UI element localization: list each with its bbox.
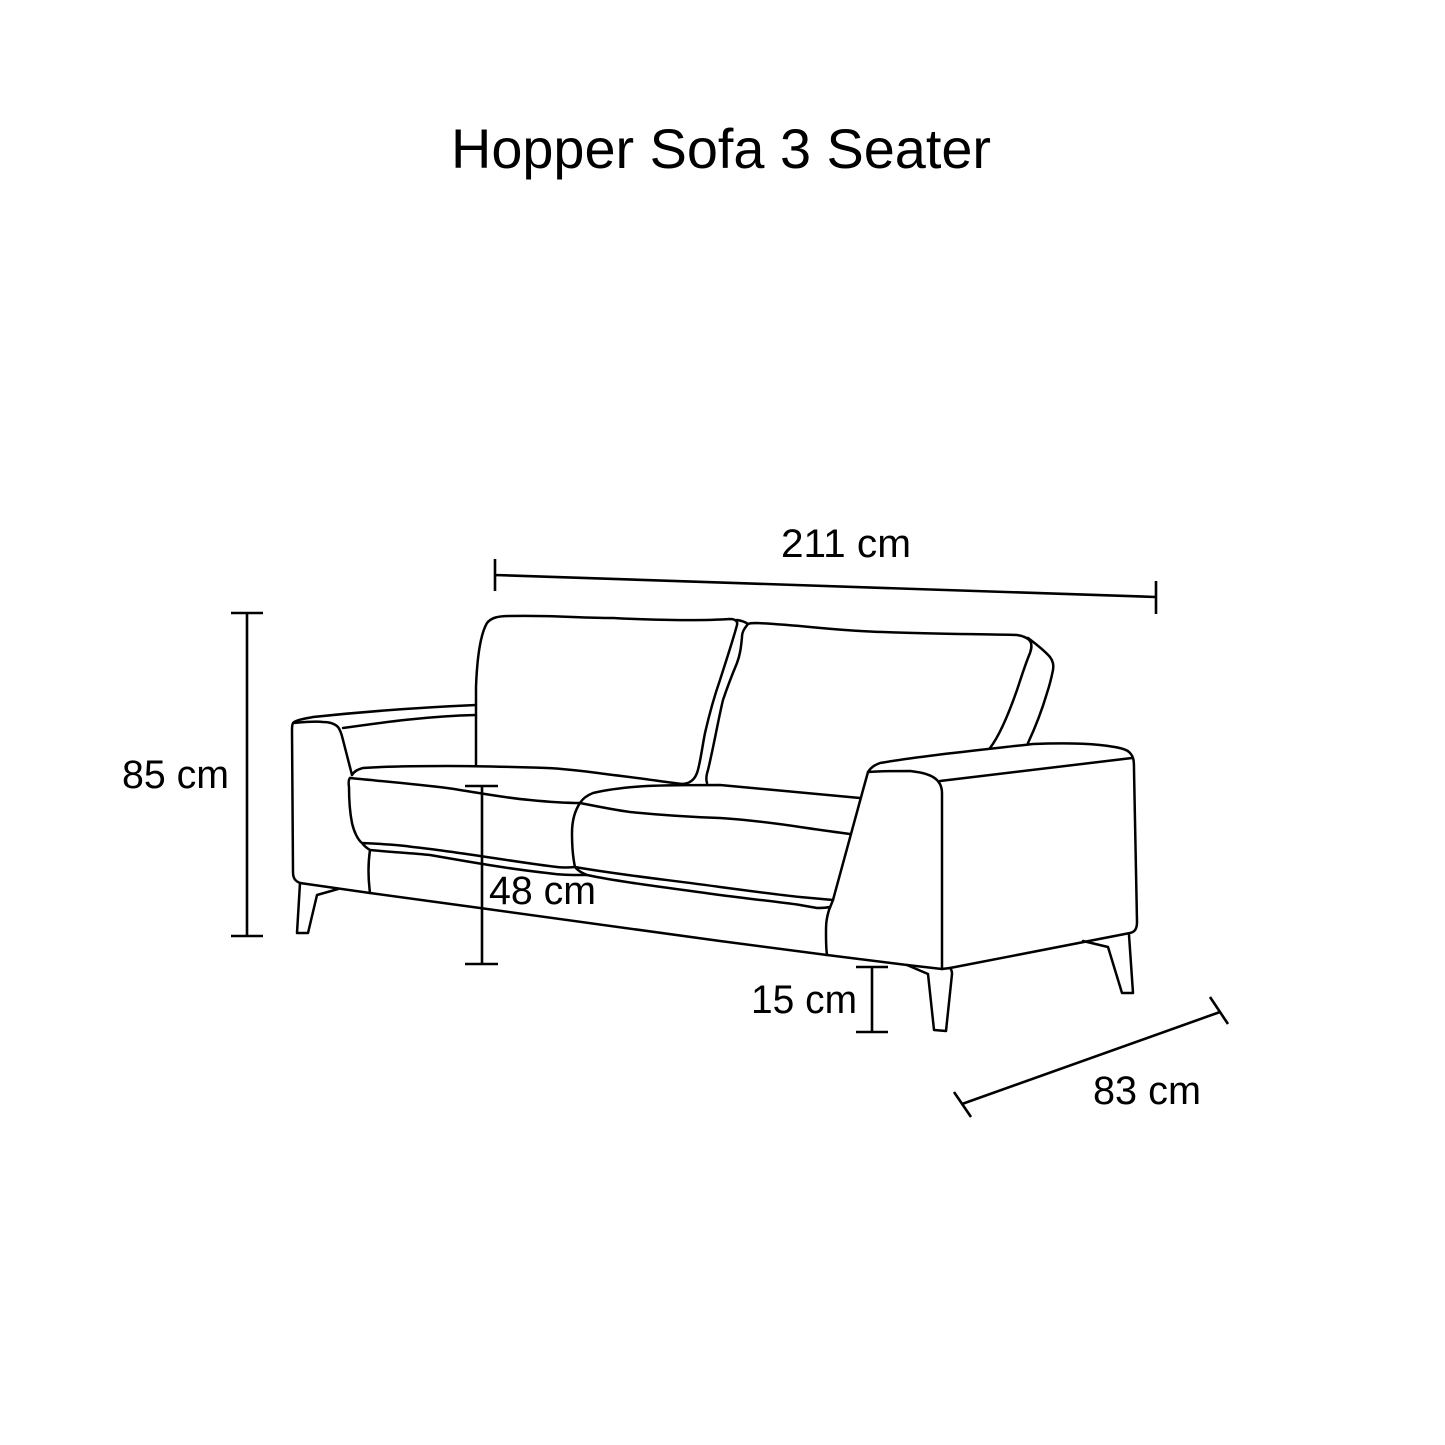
dimension: seat height 48 cm: 48 cm — [489, 869, 596, 913]
dimension: height 85 cm: 85 cm — [122, 753, 229, 797]
left back cushion — [476, 616, 737, 784]
dimension: leg height 15 cm: 15 cm — [751, 978, 857, 1022]
right arm seam — [940, 758, 1132, 781]
dimension: width 211 cm — [495, 522, 1156, 614]
back frame — [1028, 638, 1053, 743]
left seat cushion — [352, 766, 682, 784]
right back cushion — [706, 620, 1031, 783]
dimension: depth 83 cm: 83 cm — [1093, 1069, 1201, 1113]
seat base seam — [368, 850, 370, 893]
dimension: depth 83 cm — [954, 997, 1228, 1117]
right arm — [868, 743, 1137, 969]
left leg — [297, 883, 338, 933]
rear right leg — [1083, 935, 1133, 993]
front leg — [907, 965, 952, 1031]
title: Hopper Sofa 3 Seater — [451, 117, 991, 180]
right seat cushion — [580, 785, 860, 803]
dimension: width 211 cm: 211 cm — [781, 522, 911, 566]
dimension: height 85 cm — [122, 613, 263, 936]
right arm front edge — [826, 772, 868, 955]
sofa base line — [300, 883, 942, 969]
dimension: leg height 15 cm — [751, 967, 888, 1032]
left arm — [292, 705, 476, 883]
dimension: seat height 48 cm — [465, 786, 596, 964]
sofa line drawing — [292, 616, 1137, 1031]
